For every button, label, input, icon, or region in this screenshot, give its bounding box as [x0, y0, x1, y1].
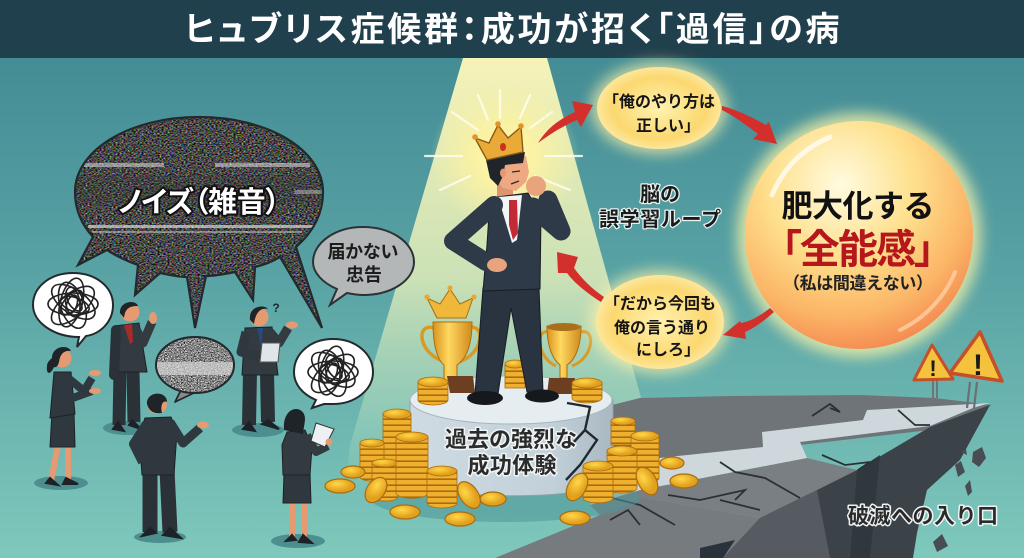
loop label: 誤学習ループ [599, 208, 721, 231]
sphere text: （私は間違えない） [783, 273, 933, 293]
sphere text: 「全能感」 [782, 228, 934, 272]
title: ヒュブリス症候群：成功が招く「過信」の病 [184, 10, 840, 49]
trophy: right [540, 323, 591, 394]
arrow: figure to belief [538, 101, 593, 143]
loop label [599, 183, 721, 231]
sphere text [782, 189, 934, 293]
oval: do as I say: 「だから今回も [604, 294, 716, 313]
arrow: belief to sphere [722, 106, 777, 144]
podium label [445, 427, 577, 478]
podium shadow [370, 474, 640, 522]
radiant glow [425, 83, 582, 233]
arrow: sphere to statement [723, 308, 774, 339]
coin stacks [360, 360, 659, 508]
loose coins [325, 457, 698, 526]
person: man back view centre [134, 394, 209, 543]
oval: my way is right: 「俺のやり方は [603, 92, 715, 111]
podium [410, 376, 613, 496]
oval: my way is right: 正しい」 [636, 117, 700, 135]
person: man left pointing [103, 302, 157, 435]
bubble: unreached advice: 忠告 [346, 265, 382, 285]
noise label: ノイズ（雑音） [118, 185, 280, 219]
bubble: unreached advice: 届かない [328, 242, 398, 262]
warning signs: ! [929, 356, 937, 381]
cliff label: 破滅への入り口 [848, 504, 998, 528]
warning signs: ! [973, 349, 983, 382]
loop label: 脳の [640, 183, 680, 206]
person: man with paper: ? [272, 301, 280, 315]
warning signs [914, 332, 1002, 408]
podium label: 成功体験 [468, 453, 556, 478]
omnipotence sphere [737, 113, 981, 357]
title bar [0, 0, 1024, 58]
person: woman with document [271, 409, 334, 548]
oval: do as I say [590, 270, 730, 374]
spotlight [345, 58, 660, 500]
podium label: 過去の強烈な [445, 427, 577, 452]
small noise bubble [155, 336, 235, 402]
person: woman left [34, 347, 101, 490]
oval: do as I say: にしろ」 [636, 341, 700, 359]
thought bubble: tangled left [33, 273, 113, 347]
oval: do as I say: 俺の言う通り [614, 319, 710, 337]
trophy: left [422, 285, 480, 393]
cliff [495, 395, 992, 558]
businessman with crown [453, 121, 561, 405]
oval: my way is right [591, 62, 727, 154]
arrow: statement to figure [557, 252, 604, 302]
thought bubble: tangled right [294, 339, 373, 408]
falling rocks [933, 447, 986, 552]
person: man with paper [232, 301, 298, 437]
bubble: unreached advice [313, 227, 414, 305]
sphere text: 肥大化する [782, 189, 934, 224]
speech bubble: noise [70, 112, 328, 332]
